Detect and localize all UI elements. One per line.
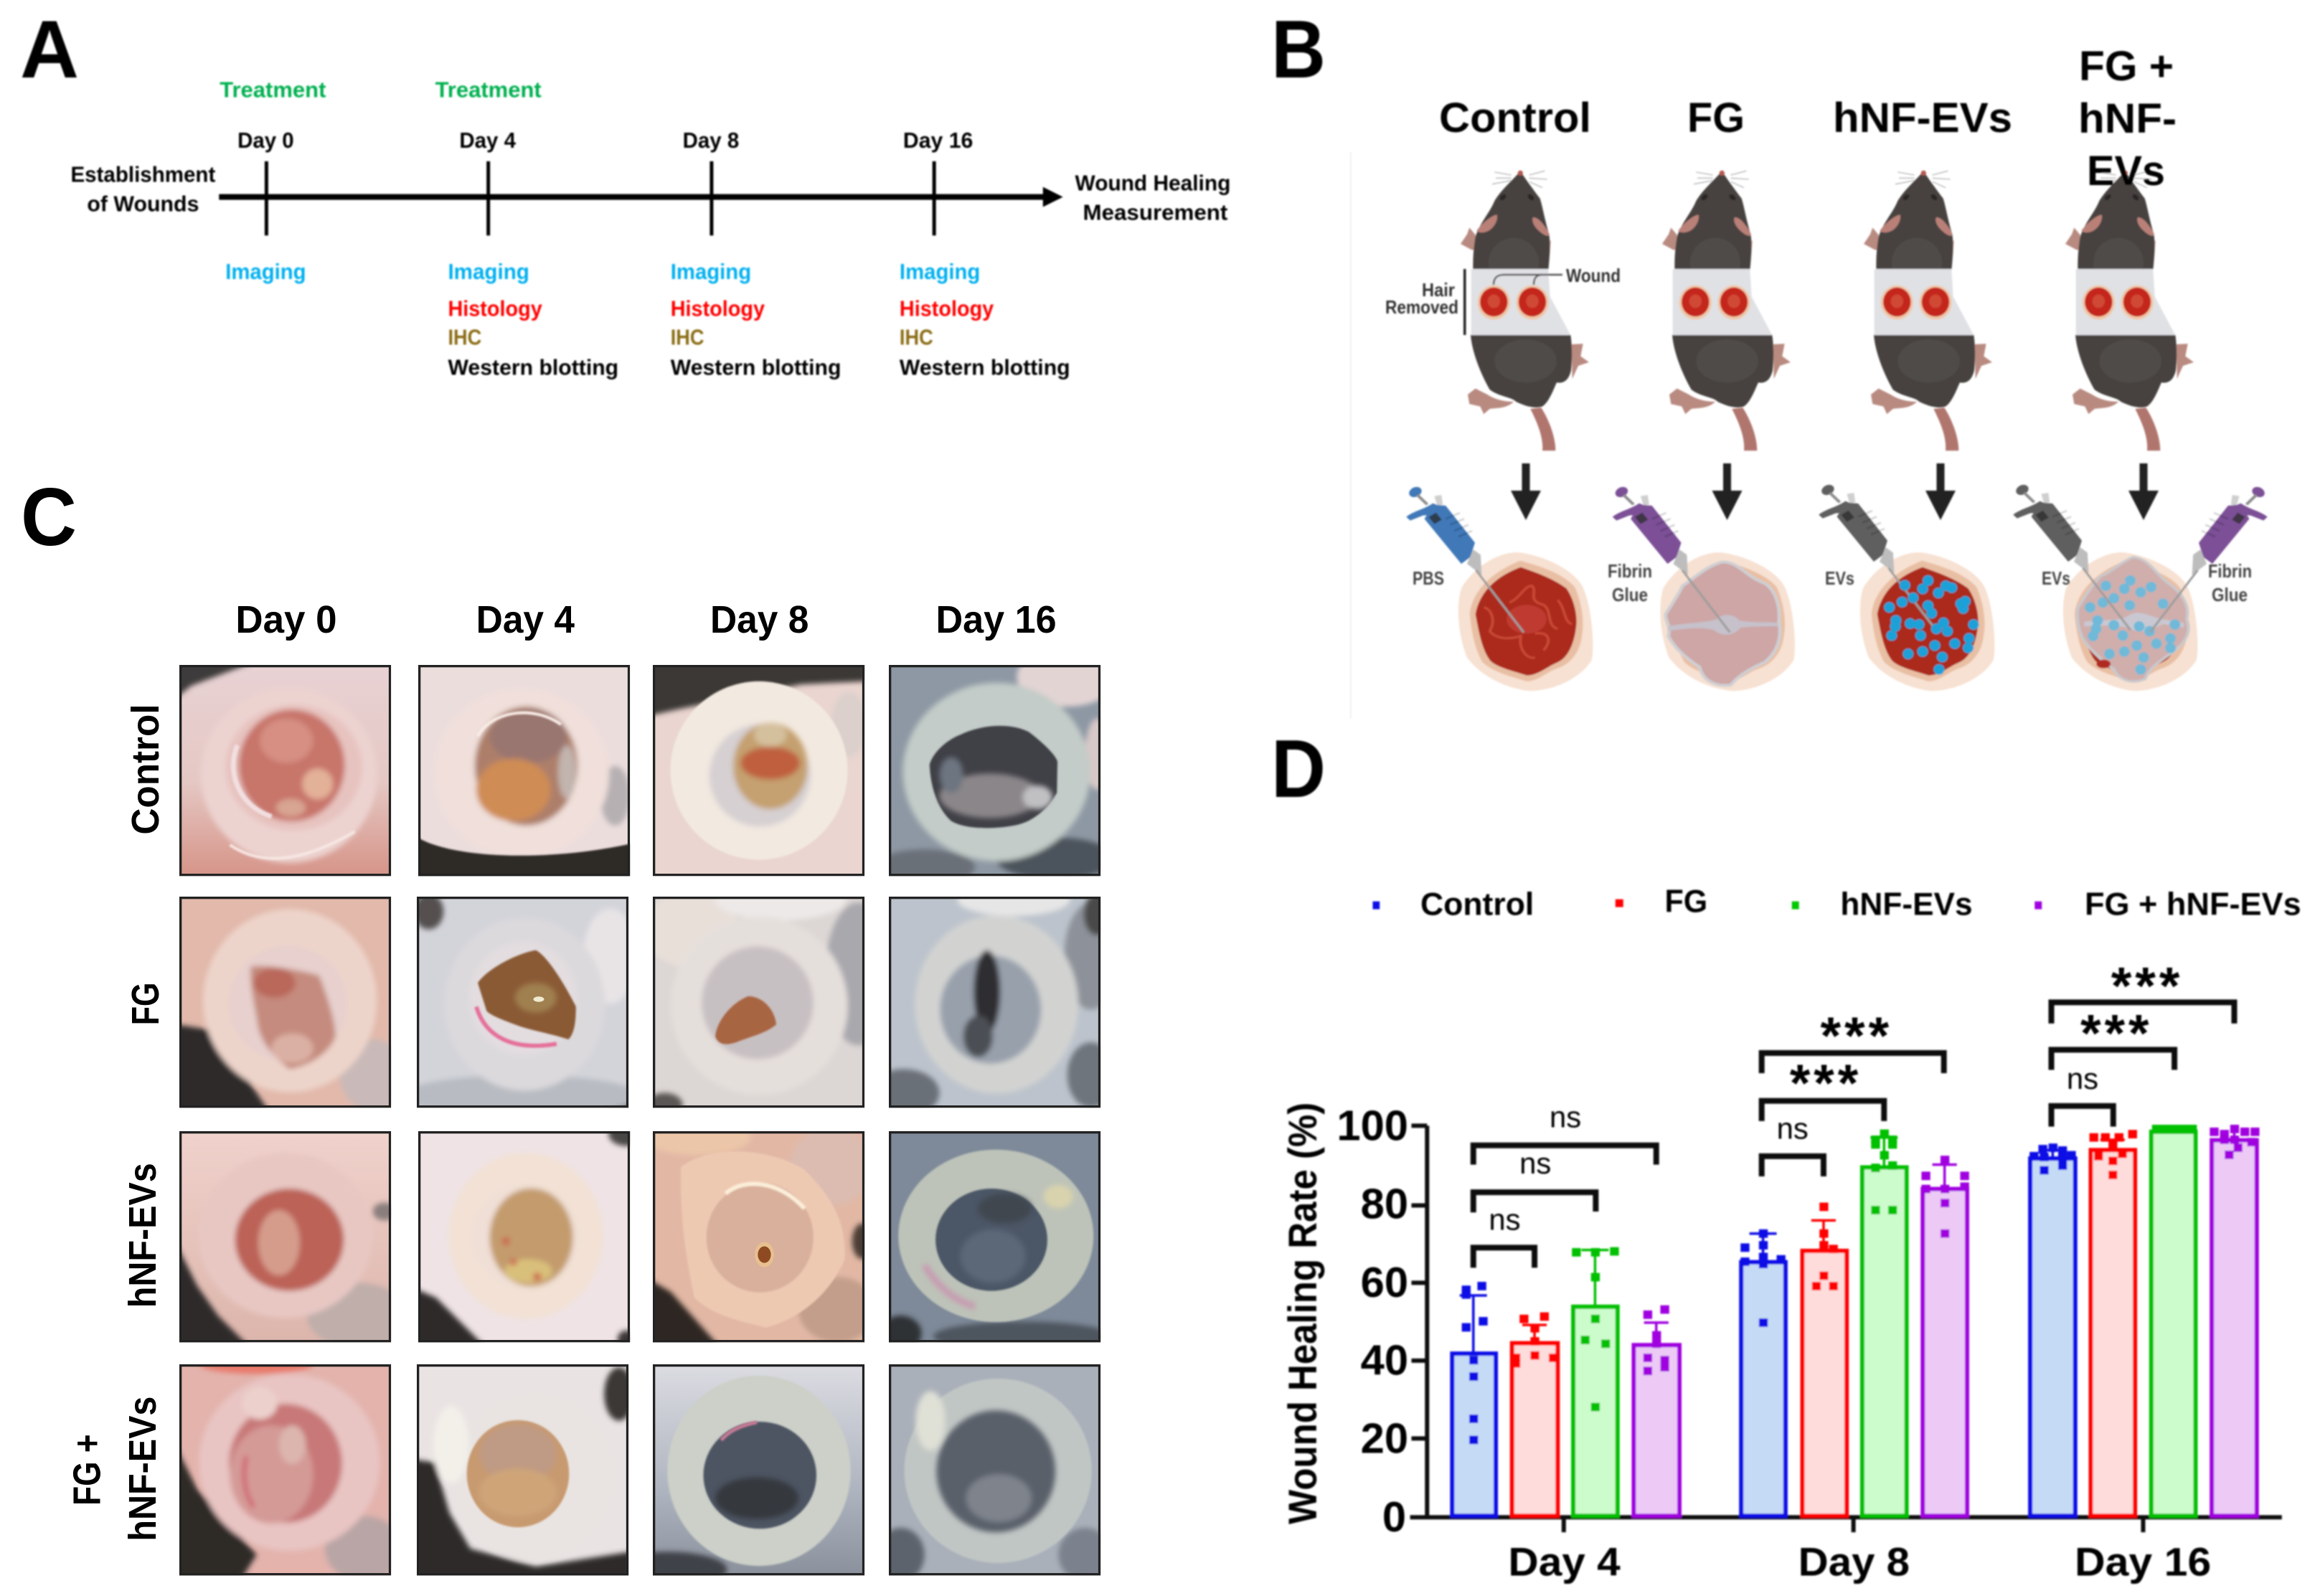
day labels: Day 4 — [459, 128, 516, 153]
photo: hNF-EVs day 4 — [418, 1131, 630, 1343]
agent labels — [1413, 560, 2252, 605]
IHC labels — [448, 325, 933, 350]
photo: FG plus hNF-EVs day 8 — [608, 1364, 864, 1587]
imaging labels: Imaging — [225, 259, 306, 284]
legend: FG + hNF-EVs — [2085, 887, 2301, 922]
row labels: hNF-EVs — [121, 1163, 164, 1308]
day labels: Day 8 — [683, 128, 739, 153]
start label: Establishment — [70, 162, 215, 187]
photo: control day 8 — [650, 662, 867, 876]
annotation: wound and hair removed: Hair — [1422, 279, 1455, 301]
western blotting labels — [448, 354, 1070, 379]
row labels: Control — [124, 704, 167, 835]
group headings: FG — [1687, 95, 1745, 141]
bars: day 8 — [1741, 1168, 1967, 1516]
data points: hNF-EVs — [1572, 1125, 2197, 1411]
panel B: treatment groups — [1271, 4, 2268, 719]
histology labels: Histology — [671, 296, 765, 321]
group headings: Control — [1439, 95, 1591, 141]
panel C: wound photographs — [21, 472, 1118, 1587]
column headers: Day 16 — [935, 598, 1057, 641]
x axis labels: Day 8 — [1798, 1540, 1910, 1584]
photo: control day 16 — [889, 665, 1100, 877]
agent labels: Glue — [2212, 584, 2248, 605]
significance labels: ns — [2067, 1062, 2098, 1095]
western blotting labels: Western blotting — [900, 354, 1070, 379]
y axis tick labels — [1336, 1102, 1408, 1541]
EV particles — [1884, 575, 1979, 675]
legend: FG — [1664, 884, 1707, 920]
significance labels: ns — [1550, 1100, 1581, 1134]
annotation: wound and hair removed: Wound — [1566, 265, 1621, 286]
agent labels: Fibrin — [2208, 560, 2252, 582]
panel letter A: A — [20, 4, 79, 95]
column headers: Day 0 — [235, 598, 337, 641]
mice illustrations — [1461, 171, 2194, 450]
column headers: Day 4 — [476, 598, 575, 641]
end label: Wound Healing — [1075, 171, 1230, 196]
western blotting labels: Western blotting — [671, 354, 841, 379]
column headers — [235, 598, 1057, 641]
day labels — [237, 128, 973, 153]
group headings: hNF-EVs — [1833, 95, 2012, 141]
panel A: experimental timeline — [20, 4, 1230, 379]
wound: fibrin glue — [1613, 485, 1795, 691]
treatment labels — [220, 77, 542, 102]
significance stars: *** — [2080, 1003, 2149, 1062]
data points: FG plus hNF-EVs — [1644, 1125, 2260, 1375]
y axis tick labels: 100 — [1336, 1102, 1408, 1149]
imaging labels: Imaging — [900, 259, 980, 284]
y axis tick labels: 20 — [1361, 1415, 1408, 1463]
row labels: hNF-EVs — [121, 1397, 164, 1541]
group headings: hNF- — [2078, 95, 2177, 142]
bars: day 16 — [2030, 1132, 2257, 1516]
y axis tick labels: 60 — [1361, 1258, 1408, 1306]
histology labels: Histology — [900, 296, 994, 321]
axes — [1410, 1125, 2282, 1532]
histology labels — [448, 296, 994, 321]
error bars — [1460, 1132, 2234, 1354]
significance stars: *** — [1790, 1053, 1859, 1113]
panel letter D: D — [1271, 724, 1326, 815]
timeline content — [70, 77, 1230, 379]
photo: FG plus hNF-EVs day 4 — [414, 1364, 634, 1579]
legend: Control — [1420, 887, 1534, 922]
agent labels: PBS — [1413, 567, 1444, 589]
start label: of Wounds — [87, 191, 199, 216]
agent labels: Fibrin — [1608, 560, 1652, 582]
photo: control day 0 — [176, 662, 391, 876]
x axis labels: Day 4 — [1508, 1540, 1621, 1584]
x axis labels: Day 16 — [2075, 1540, 2211, 1584]
day labels: Day 0 — [237, 128, 294, 153]
photo: FG day 16 — [889, 897, 1100, 1108]
IHC labels: IHC — [448, 325, 481, 350]
end label — [1075, 171, 1230, 225]
data points: FG — [1512, 1130, 2137, 1368]
photo: hNF-EVs day 16 — [889, 1131, 1100, 1343]
IHC labels: IHC — [900, 325, 933, 350]
photo: FG plus hNF-EVs day 0 — [179, 1364, 392, 1575]
wound: fibrin glue plus EVs — [2013, 483, 2268, 691]
annotation: wound and hair removed — [1385, 265, 1621, 318]
bars, error bars and data points — [1410, 1002, 2282, 1532]
column headers: Day 8 — [710, 598, 808, 641]
y axis title: Wound Healing Rate (%) — [1281, 1102, 1325, 1524]
significance stars — [1790, 956, 2180, 1113]
photo: FG day 4 — [417, 897, 628, 1108]
imaging labels: Imaging — [671, 259, 751, 284]
chart content — [1281, 884, 2301, 1584]
timeline arrow with ticks — [219, 161, 1063, 235]
agent labels: EVs — [2042, 567, 2070, 589]
treatment labels: Treatment — [220, 77, 326, 102]
significance stars: *** — [1821, 1006, 1890, 1065]
significance labels: ns — [1489, 1203, 1521, 1237]
photo: hNF-EVs day 8 — [653, 1131, 865, 1343]
bars: day 4 — [1452, 1307, 1679, 1516]
row labels: FG + — [65, 1434, 108, 1506]
photo: control day 4 — [415, 665, 633, 879]
row labels — [65, 704, 167, 1541]
imaging labels: Imaging — [448, 259, 529, 284]
y axis tick labels: 0 — [1382, 1493, 1406, 1541]
photo: FG day 8 — [653, 897, 865, 1108]
IHC labels: IHC — [671, 325, 704, 350]
y axis tick labels: 40 — [1361, 1336, 1408, 1384]
histology labels: Histology — [448, 296, 542, 321]
group headings — [1439, 43, 2177, 194]
end label: Measurement — [1083, 199, 1227, 225]
significance brackets — [1474, 1002, 2234, 1267]
data points: control — [1462, 1143, 2076, 1444]
photo: FG plus hNF-EVs day 16 — [877, 1364, 1112, 1582]
panel D: wound healing rate bar chart — [1271, 724, 2301, 1584]
legend: hNF-EVs — [1840, 887, 1973, 922]
panel letter C: C — [21, 472, 77, 563]
group headings: FG + — [2079, 43, 2174, 90]
x axis labels — [1508, 1540, 2211, 1584]
imaging labels — [225, 259, 980, 284]
day labels: Day 16 — [903, 128, 973, 153]
row labels: FG — [124, 983, 167, 1025]
legend — [1372, 884, 2301, 922]
y axis tick labels: 80 — [1361, 1180, 1408, 1228]
start label — [70, 162, 215, 216]
photo: FG day 0 — [176, 897, 405, 1111]
significance labels: ns — [1519, 1146, 1551, 1180]
photo: hNF-EVs day 0 — [179, 1131, 392, 1343]
agent labels: EVs — [1825, 567, 1854, 589]
panel letter B: B — [1271, 4, 1326, 95]
group headings: EVs — [2087, 148, 2165, 194]
western blotting labels: Western blotting — [448, 354, 618, 379]
significance labels — [1489, 1062, 2098, 1237]
wound: PBS control — [1406, 485, 1593, 691]
agent labels: Glue — [1612, 584, 1648, 605]
annotation: wound and hair removed: Removed — [1385, 296, 1458, 318]
down arrows — [1511, 463, 2159, 520]
treatment labels: Treatment — [435, 77, 542, 102]
significance stars: *** — [2111, 956, 2180, 1016]
significance labels: ns — [1777, 1112, 1809, 1145]
wound: EVs — [1819, 483, 1994, 691]
EV particles in glue — [2085, 575, 2180, 675]
